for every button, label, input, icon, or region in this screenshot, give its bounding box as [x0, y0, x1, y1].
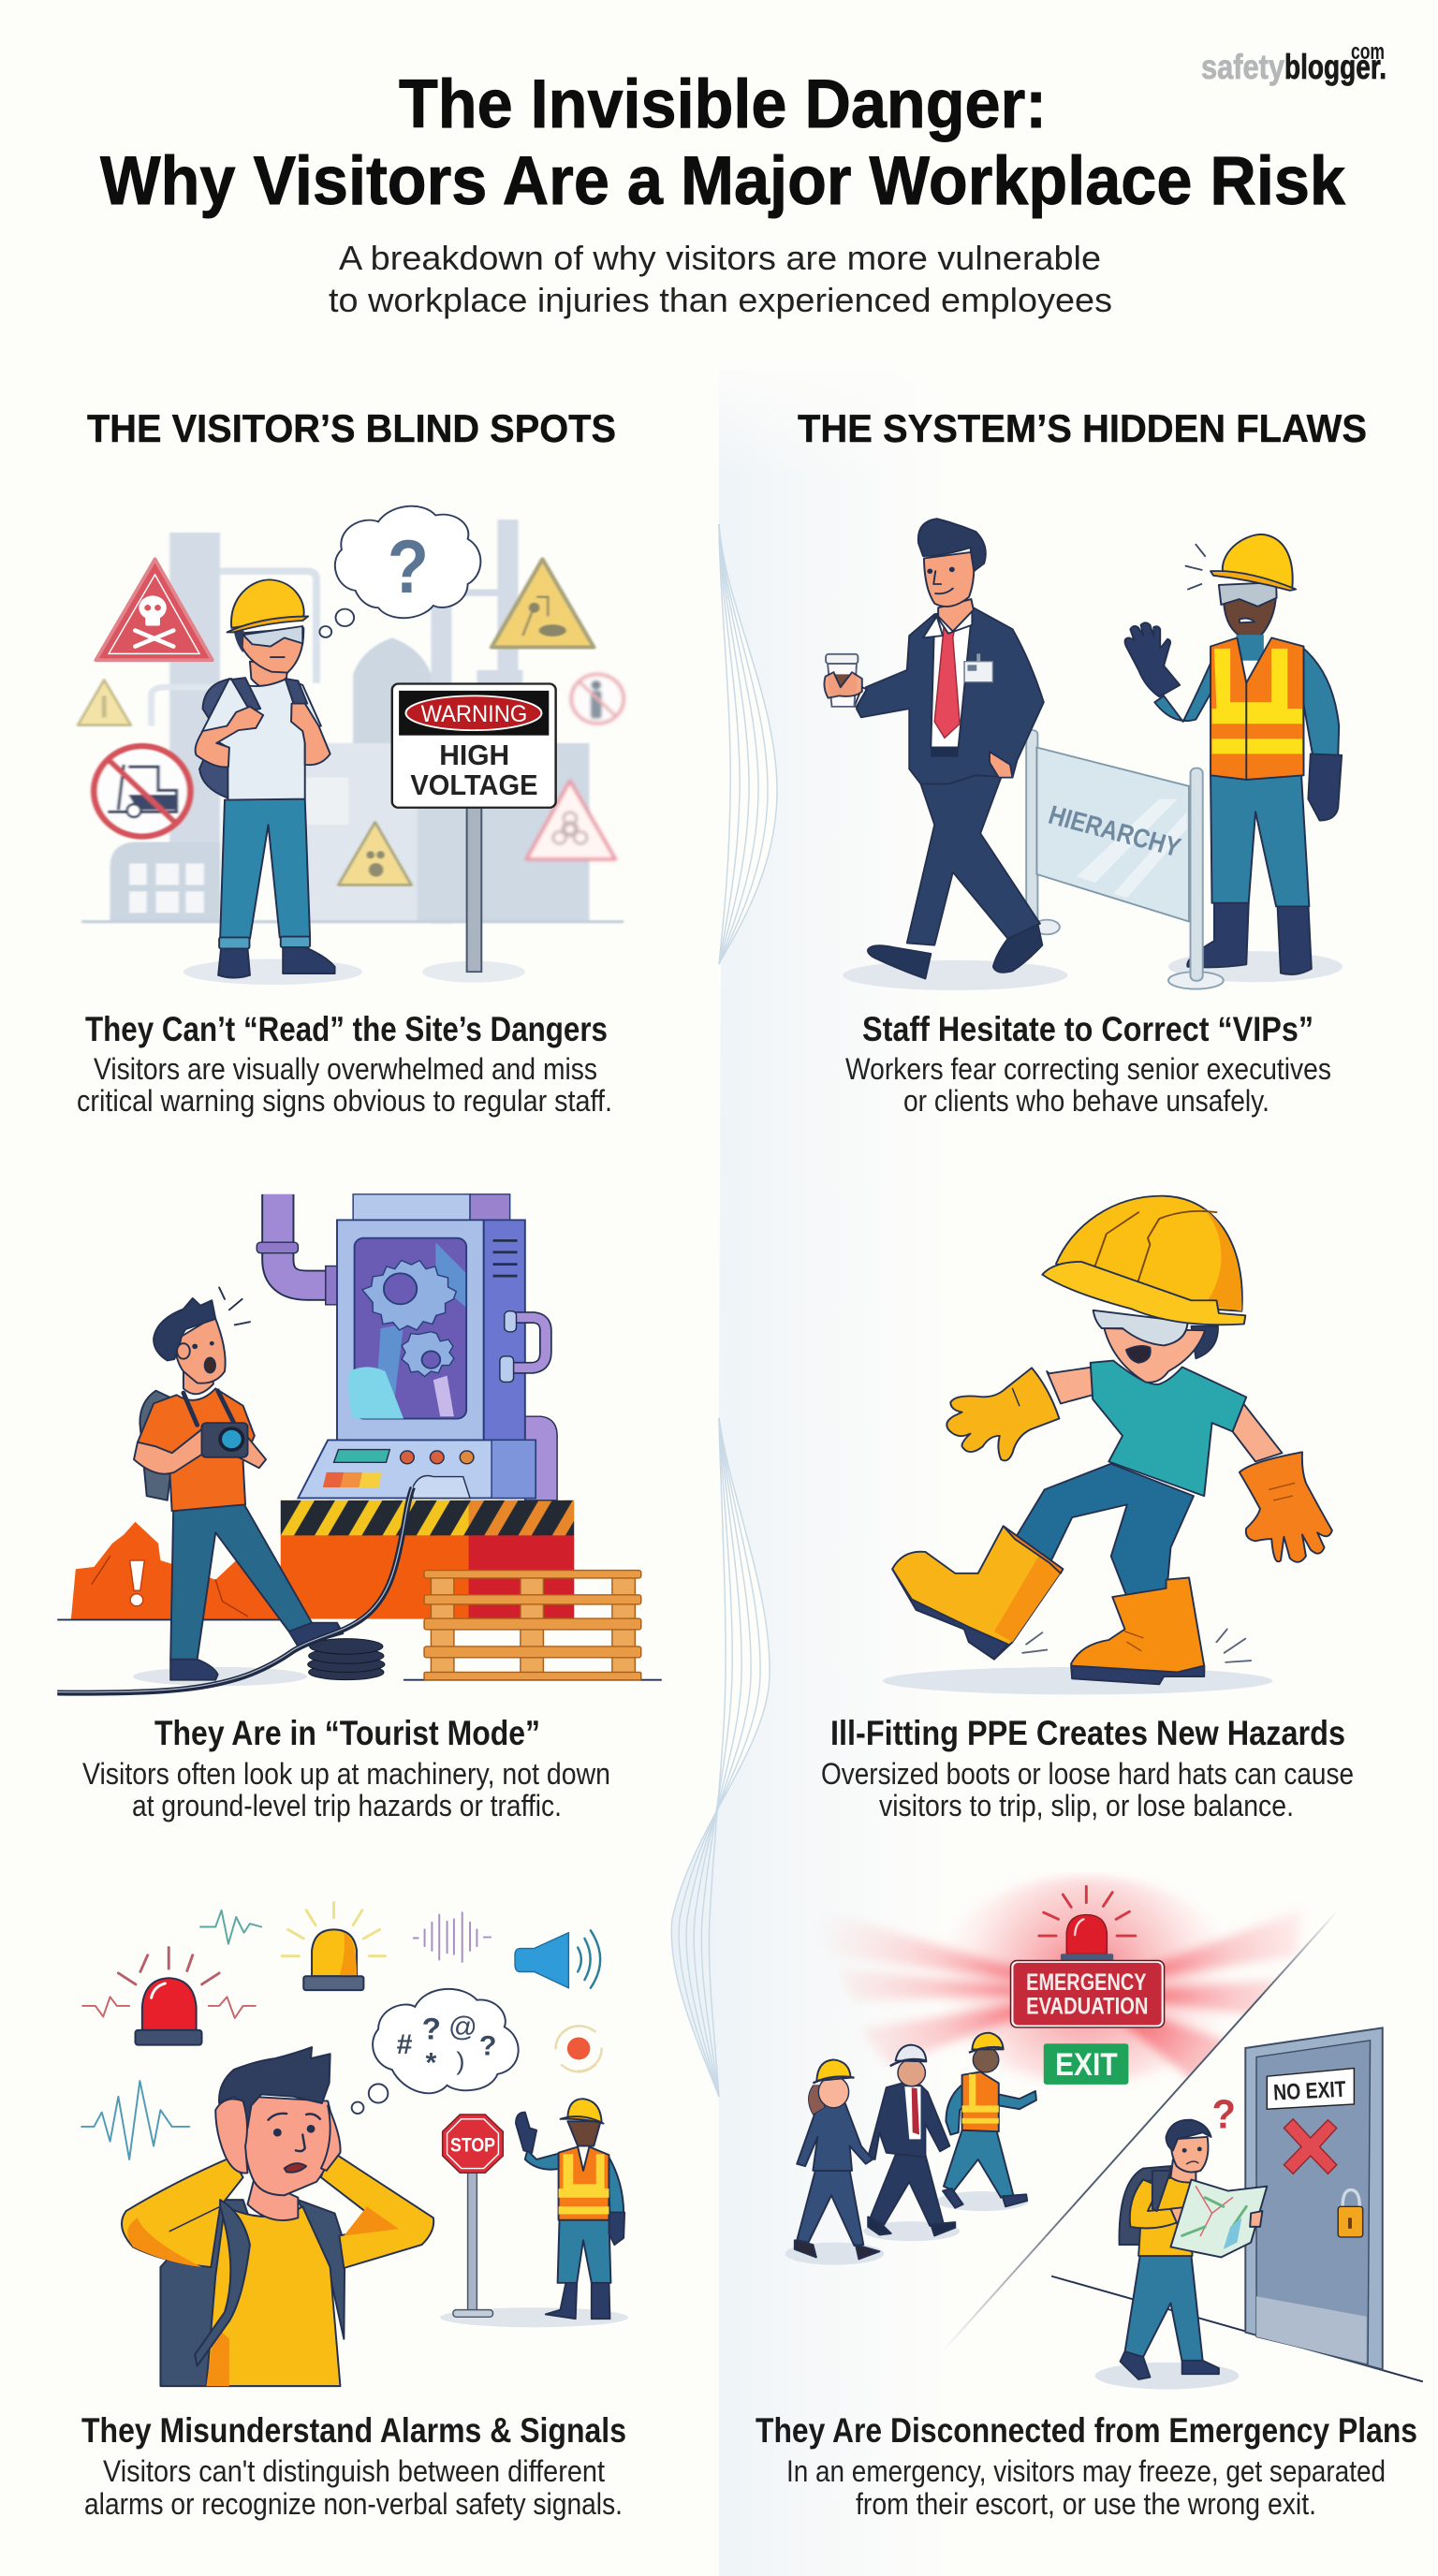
machine body with gears [337, 1194, 546, 1440]
no exit door [1245, 2027, 1383, 2369]
illustration: confused visitor with alarms [81, 1903, 628, 2386]
control panel [298, 1440, 536, 1498]
text: they can't read the site's dangers: Visitors are visually overwhelmed and miss [94, 1052, 597, 1086]
blurred factory background [81, 520, 624, 924]
red alarm glow [820, 1877, 1301, 2083]
text: staff hesitate to correct vips: Staff Hesitate to Correct “VIPs” [862, 1010, 1313, 1048]
text: they misunderstand alarms and signals: alarms or recognize non-verbal safety signals. [84, 2487, 623, 2521]
confused thought bubble: @ [448, 2012, 477, 2042]
text: they are in tourist mode: at ground-level trip hazards or traffic. [132, 1789, 562, 1822]
text: they misunderstand alarms and signals: Visitors can't distinguish between different [103, 2454, 605, 2488]
illustration: emergency evacuation and lost visitor [785, 1877, 1423, 2389]
alarm dot [556, 2026, 602, 2071]
text: they misunderstand alarms and signals [81, 2411, 626, 2521]
illustration: visitor among warning signs [78, 506, 624, 985]
barrier left post [1026, 730, 1060, 934]
confused thought bubble: ? [422, 2012, 441, 2045]
stop sign: STOP [450, 2134, 495, 2156]
motion lines [1022, 1630, 1251, 1662]
confused thought bubble: ? [479, 2031, 496, 2062]
male executive evacuee [868, 2045, 955, 2235]
title [100, 66, 1345, 219]
text: ill-fitting ppe creates new hazards: visitors to trip, slip, or lose balance. [879, 1789, 1294, 1822]
emergency sign: EMERGENCY [1026, 1969, 1147, 1996]
blue wave [81, 2081, 189, 2159]
logo: safetyblogger.com: blogger. [1284, 48, 1387, 86]
text: ill-fitting ppe creates new hazards: Ill-Fitting PPE Creates New Hazards [830, 1714, 1345, 1752]
text: ill-fitting ppe creates new hazards [821, 1714, 1354, 1822]
text: they are in tourist mode: Visitors often look up at machinery, not down [82, 1757, 610, 1791]
tourist figure [134, 1287, 343, 1680]
shadow of lost visitor [1095, 2363, 1239, 2389]
exit sign: EXIT [1055, 2046, 1118, 2083]
logo: safetyblogger.com: safety [1201, 48, 1284, 86]
purple sound wave [414, 1912, 491, 1962]
confused thought bubble: * [426, 2048, 437, 2078]
shadow [133, 1667, 307, 1686]
right glove [1240, 1452, 1332, 1562]
worker figure [1125, 534, 1342, 974]
illustration: executive and worker with hierarchy barrier [824, 519, 1343, 990]
warning high voltage sign: VOLTAGE [410, 769, 538, 801]
distressed visitor figure [122, 2047, 433, 2386]
confused thought bubble: # [397, 2030, 413, 2060]
logo: safetyblogger.com [1201, 39, 1387, 86]
barrier right post [1168, 768, 1224, 989]
subtitle: A breakdown of why visitors are more vulnerable [339, 239, 1101, 277]
text: they are disconnected from emergency plans [756, 2411, 1417, 2521]
emergency sign [1011, 1960, 1165, 2027]
hierarchy glass panel [1036, 747, 1189, 921]
text: staff hesitate to correct vips: or clients who behave unsafely. [903, 1084, 1269, 1118]
yellow beacon [282, 1903, 385, 1990]
sign: no pedestrians and biohazard [526, 674, 624, 859]
kicked boot [892, 1526, 1063, 1660]
teal wave [200, 1910, 261, 1944]
illustration: ill-fitting ppe figure [883, 1196, 1332, 1694]
title: Why Visitors Are a Major Workplace Risk [100, 143, 1345, 219]
text: they can't read the site's dangers: They Can’t “Read” the Site’s Dangers [85, 1010, 608, 1048]
worker evacuee [943, 2033, 1036, 2208]
orange rubble with exclamation [71, 1522, 281, 1619]
thought bubble with question mark [319, 506, 480, 637]
no exit door: NO EXIT [1273, 2077, 1346, 2106]
purple pipes [257, 1194, 557, 1500]
warning high voltage sign [392, 684, 556, 808]
text: they misunderstand alarms and signals: They Misunderstand Alarms & Signals [81, 2411, 626, 2450]
column heading: the system's hidden flaws: THE SYSTEM’S HIDDEN FLAWS [798, 406, 1367, 450]
planted boot [1071, 1577, 1204, 1675]
red beacon [82, 1948, 256, 2045]
title: The Invisible Danger: [399, 66, 1047, 142]
warning high voltage sign: HIGH [439, 739, 509, 771]
floor line [1051, 2276, 1423, 2381]
cable [57, 1487, 413, 1693]
text: staff hesitate to correct vips [845, 1010, 1331, 1118]
text: they are in tourist mode [82, 1714, 610, 1822]
text: they are disconnected from emergency plans: from their escort, or use the wrong exit. [856, 2487, 1316, 2521]
machine base [281, 1500, 574, 1619]
signalling worker [516, 2099, 624, 2319]
ground lines [57, 1619, 662, 1680]
subtitle [329, 239, 1112, 319]
subtitle: to workplace injuries than experienced employees [329, 281, 1112, 319]
thought bubble with question mark: ? [388, 525, 429, 609]
group of evacuating people [785, 2033, 1036, 2265]
left glove [946, 1368, 1059, 1460]
text: they are in tourist mode: They Are in “Tourist Mode” [154, 1714, 540, 1752]
emergency sign: EVADUATION [1026, 1994, 1148, 2019]
text: they can't read the site's dangers [77, 1010, 612, 1118]
text: staff hesitate to correct vips: Workers fear correcting senior executives [845, 1052, 1331, 1086]
warning sign post [467, 808, 481, 972]
stop sign [440, 2115, 628, 2327]
centre divider band [655, 356, 955, 2576]
shadows [183, 959, 362, 985]
wooden pallets [424, 1571, 641, 1680]
text: they can't read the site's dangers: critical warning signs obvious to regular staff. [77, 1084, 612, 1118]
confused thought bubble: ) [456, 2046, 464, 2075]
confused thought bubble [352, 1989, 519, 2114]
warning high voltage sign: WARNING [421, 702, 527, 727]
executive figure [824, 519, 1044, 979]
logo: safetyblogger.com: com [1351, 39, 1385, 65]
column heading: the visitor's blind spots: THE VISITOR’S BLIND SPOTS [87, 406, 616, 450]
beacon [1039, 1886, 1136, 1963]
ppe person figure [892, 1196, 1332, 1684]
lost visitor with map: ? [1212, 2093, 1236, 2137]
illustration: tourist at machine [57, 1194, 662, 1693]
lost visitor with map [1120, 2093, 1267, 2379]
sign: no forklifts [94, 746, 190, 837]
diagonal divider [944, 1910, 1338, 2350]
text: ill-fitting ppe creates new hazards: Oversized boots or loose hard hats can cause [821, 1757, 1354, 1791]
female evacuee [795, 2059, 879, 2259]
sign: toxic skull [95, 559, 213, 660]
blurred yellow signs [78, 559, 594, 885]
visitor figure [196, 579, 335, 978]
speaker icon [515, 1930, 600, 1988]
hierarchy glass panel: HIERARCHY [1045, 800, 1184, 863]
cable coil [308, 1639, 385, 1680]
